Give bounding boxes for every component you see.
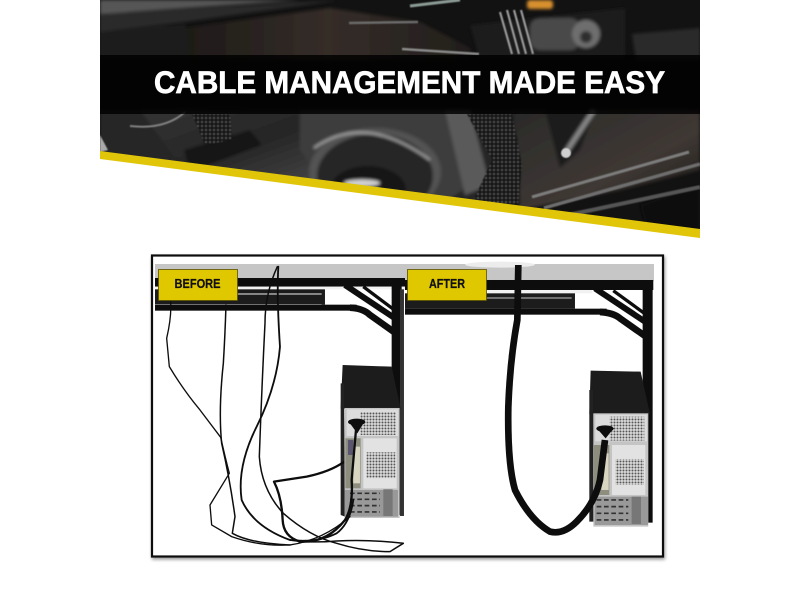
frame: [152, 256, 663, 556]
label: after: [408, 270, 486, 300]
label: after: AFTER: [429, 277, 465, 291]
cables: [167, 267, 403, 552]
panel: before: [155, 264, 412, 552]
label: before: [158, 270, 238, 300]
label: before: BEFORE: [174, 277, 220, 291]
header: engine photo banner: [100, 0, 700, 240]
engine photo: [100, 0, 700, 240]
dark title band: [100, 55, 700, 114]
before and after photo frame: [152, 256, 663, 556]
computer tower: [589, 371, 650, 527]
panel: after: [400, 262, 654, 532]
title: CABLE MANAGEMENT MADE EASY: [154, 64, 665, 100]
yellow diagonal stripe: [100, 151, 700, 238]
bundled cable sleeve: [508, 265, 605, 532]
computer tower: [341, 365, 401, 518]
table and frame: [400, 262, 654, 523]
table and frame: [155, 264, 412, 516]
